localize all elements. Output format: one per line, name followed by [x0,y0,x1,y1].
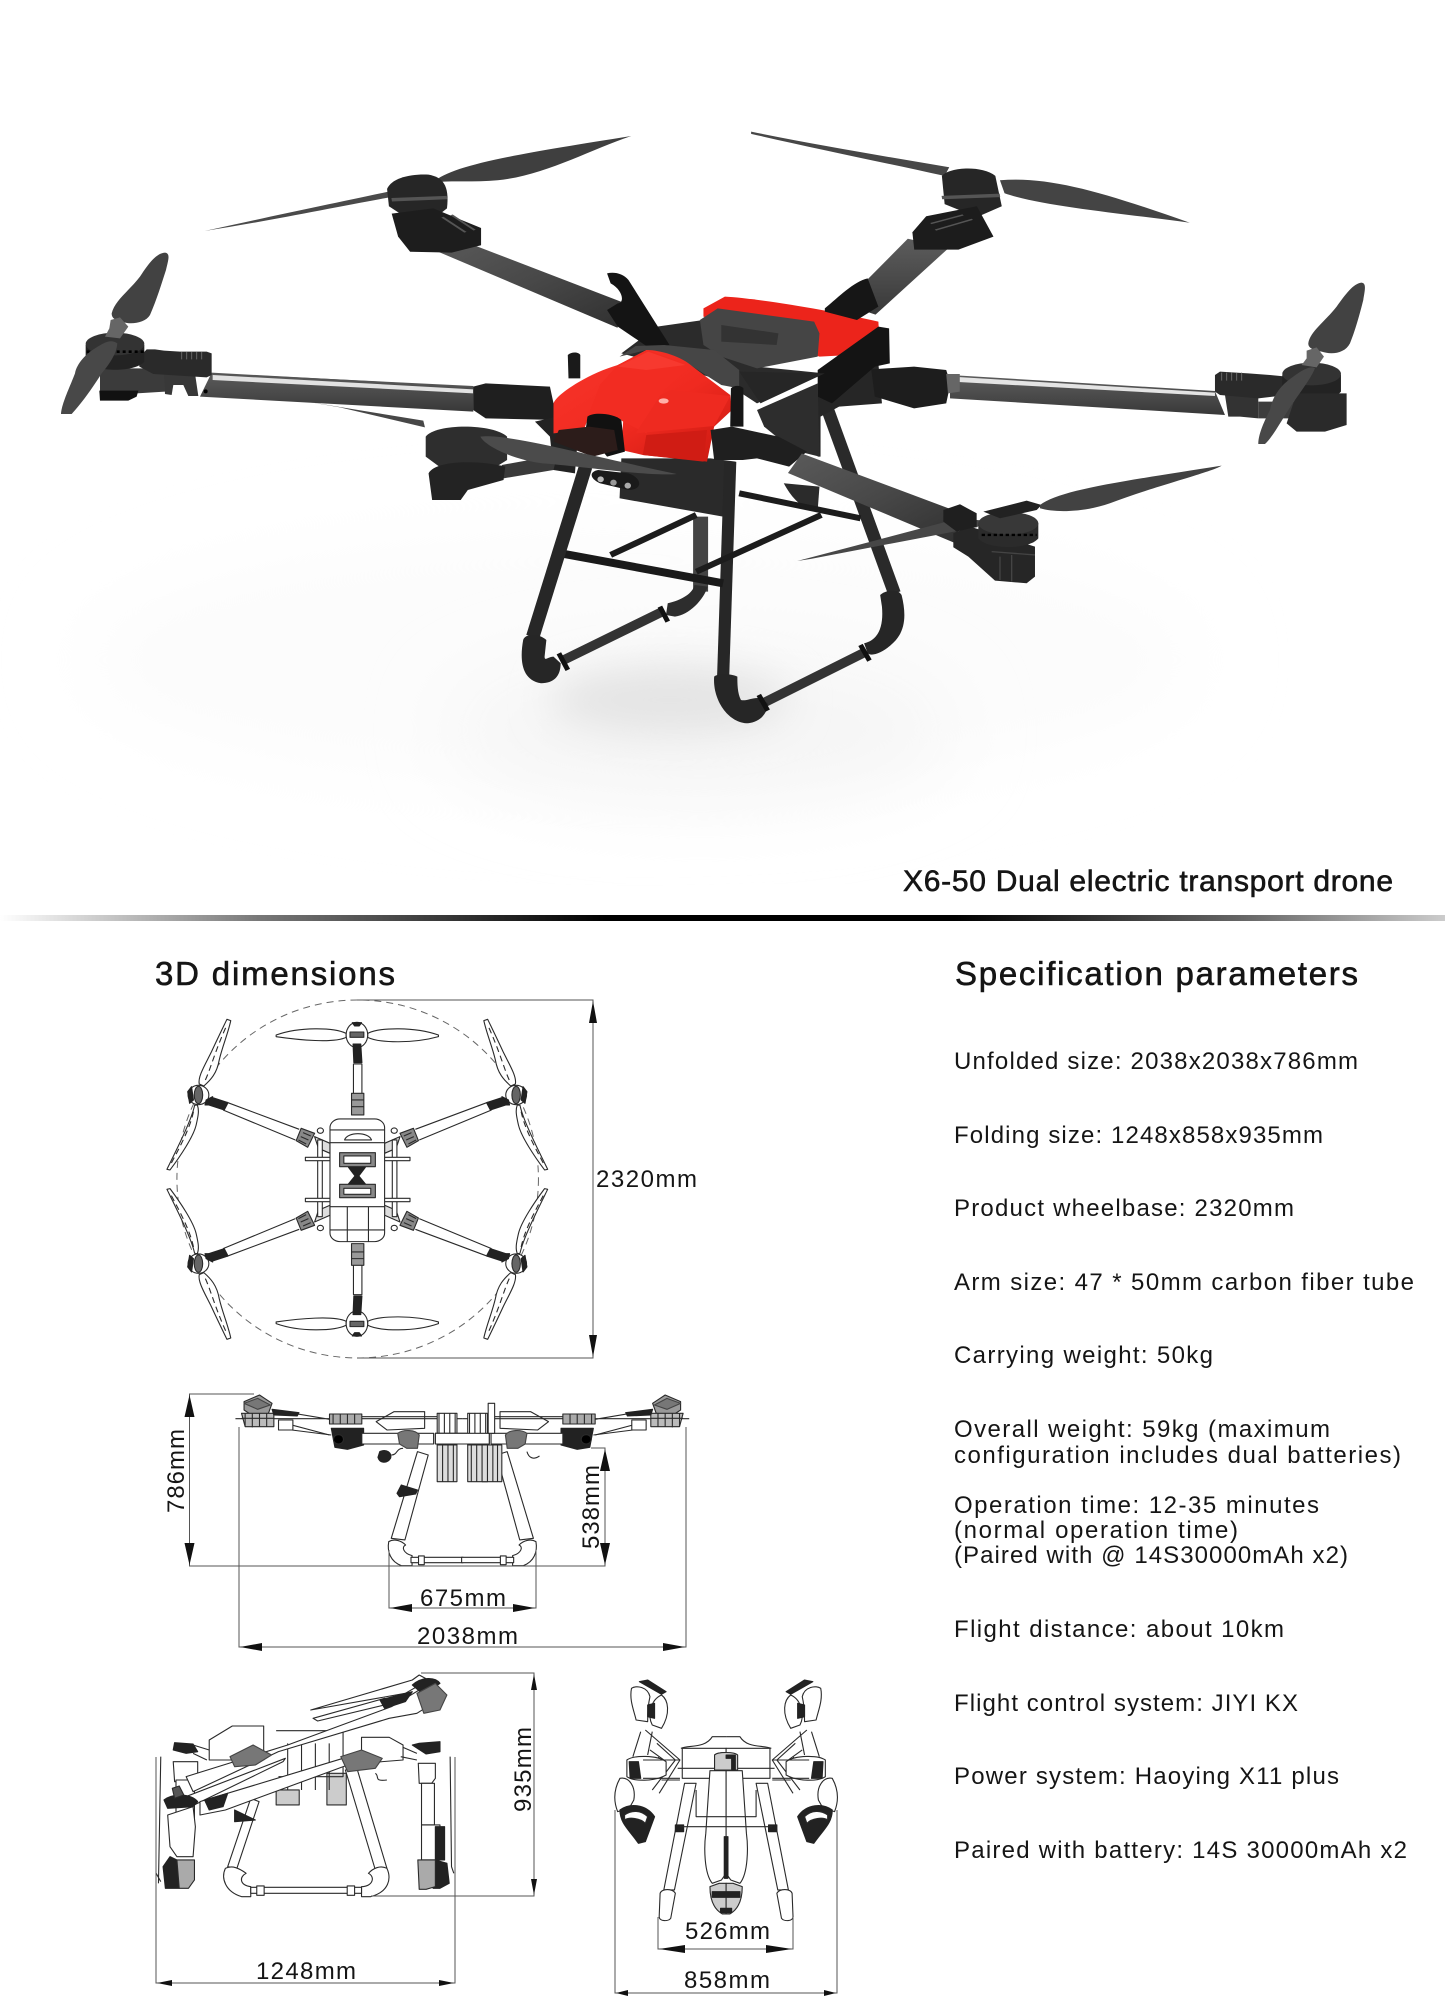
dimension label: 1248mm: 1248mm [256,1958,356,1985]
front-right leg [723,462,730,678]
dimension label: 675mm: 675mm [420,1585,506,1612]
front-left motor and arm [502,455,557,478]
left arm [61,253,473,427]
spec list: Unfolded size: 2038x2038x786mm [954,1048,1358,1075]
front-left leg [533,467,586,637]
front-right motor and blade [943,466,1222,583]
skid bars [562,612,864,703]
spec list [954,1048,1414,1864]
rear battery [700,308,819,368]
dimension label: 2320mm: 2320mm [596,1166,697,1193]
side view drone line art [235,1395,689,1566]
top view drawing [167,1000,697,1358]
back-right rotor [751,132,1190,315]
dimension label: 538mm: 538mm [578,1465,605,1549]
front red tank [554,350,732,462]
dimension label: 935mm: 935mm [510,1727,537,1812]
product caption: X6-50 Dual electric transport drone [903,865,1393,898]
spec list: Operation time: 12-35 minutes [954,1492,1319,1519]
spec list: Flight control system: JIYI KX [954,1690,1298,1717]
rear frame bracket [818,363,882,457]
spec list: Arm size: 47 * 50mm carbon fiber tube [954,1269,1414,1296]
section divider [0,915,1445,921]
dimension lines: 2320mm [357,1000,593,1358]
dimension lines: folded side view [156,1673,534,1983]
spec list: Product wheelbase: 2320mm [954,1195,1294,1222]
tank nozzle [586,414,625,457]
spec list: (normal operation time) [954,1517,1238,1544]
side view drawing [163,1394,689,1651]
indicator lights [592,470,639,490]
dimension label: 786mm: 786mm [163,1429,190,1513]
spec list: configuration includes dual batteries) [954,1442,1401,1469]
folded side view drawing [156,1673,537,1986]
floor background shading [80,530,1200,800]
spec list: Carrying weight: 50kg [954,1342,1213,1369]
right arm [950,283,1365,444]
right post and connector [730,386,743,427]
hero drone render [61,132,1365,723]
left arm connector [473,383,557,420]
back-left rotor [205,136,631,328]
cross bars [561,553,723,583]
dimension lines: side view [190,1394,686,1647]
drone body, tanks and landing gear [426,273,960,723]
front dark box [620,458,736,517]
spec list: Flight distance: about 10km [954,1616,1284,1643]
folded side view line art [156,1675,454,1897]
spec list: (Paired with @ 14S30000mAh x2) [954,1542,1348,1569]
front view drawing [615,1680,837,1996]
front-right rotor [788,453,986,561]
top view drone line art [167,1000,548,1358]
spec list: Folding size: 1248x858x935mm [954,1122,1323,1149]
right arm connector [871,367,950,408]
heading: 3D dimensions: 3D dimensions [155,955,395,992]
front-left blade [480,436,677,474]
spec list: Power system: Haoying X11 plus [954,1763,1339,1790]
heading: specification parameters: Specification parameters [955,955,1358,992]
skid elbows [522,635,561,683]
dimension label: 2038mm: 2038mm [417,1623,518,1650]
dimension label: 526mm: 526mm [685,1918,770,1945]
dimension label: 858mm: 858mm [684,1967,770,1994]
spec list: Paired with battery: 14S 30000mAh x2 [954,1837,1407,1864]
arm hook bracket [607,273,670,348]
front view line art [615,1680,837,1921]
rear legs [701,407,894,593]
rear red tank [703,297,880,357]
front battery [620,345,739,388]
spec list: Overall weight: 59kg (maximum [954,1416,1330,1443]
dimension lines: front view [615,1810,837,1993]
